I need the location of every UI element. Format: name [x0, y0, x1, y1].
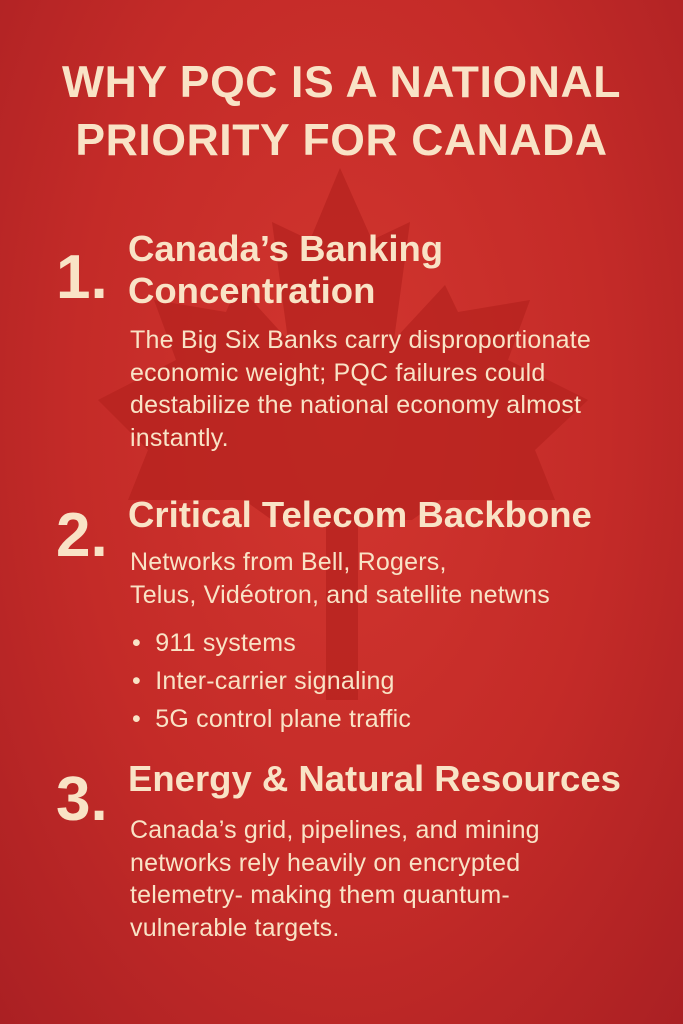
number 1: 1.	[56, 243, 108, 312]
body 3: telemetry- making them quantum-	[130, 881, 510, 909]
body 1: destabilize the national economy almost	[130, 391, 581, 419]
section 1	[56, 228, 591, 452]
body 1: economic weight; PQC failures could	[130, 358, 546, 386]
bullet list: • 911 systems	[132, 629, 296, 657]
title: WHY PQC IS A NATIONAL	[62, 58, 621, 107]
body 1	[130, 326, 591, 452]
number 2: 2.	[56, 501, 108, 570]
body 3: vulnerable targets.	[130, 914, 339, 942]
section 2	[56, 494, 592, 733]
heading 3: Energy & Natural Resources	[128, 758, 621, 799]
title: PRIORITY FOR CANADA	[75, 116, 608, 165]
heading 1: Canada’s Banking	[128, 228, 443, 269]
bullet list: • Inter-carrier signaling	[132, 667, 395, 695]
body 2: Telus, Vidéotron, and satellite netwns	[130, 580, 550, 608]
body 3	[130, 816, 540, 942]
body 1: instantly.	[130, 424, 229, 452]
body 3: Canada’s grid, pipelines, and mining	[130, 816, 540, 844]
body 2: Networks from Bell, Rogers,	[130, 548, 447, 576]
body 2	[130, 548, 550, 608]
bullet list	[132, 629, 411, 733]
section 3	[56, 758, 621, 942]
heading 1	[128, 228, 443, 311]
body 3: networks rely heavily on encrypted	[130, 848, 520, 876]
title	[62, 58, 621, 165]
bullet list: • 5G control plane traffic	[132, 705, 411, 733]
body 1: The Big Six Banks carry disproportionate	[130, 326, 591, 354]
number 3: 3.	[56, 765, 108, 834]
heading 1: Concentration	[128, 270, 375, 311]
heading 2: Critical Telecom Backbone	[128, 494, 592, 535]
